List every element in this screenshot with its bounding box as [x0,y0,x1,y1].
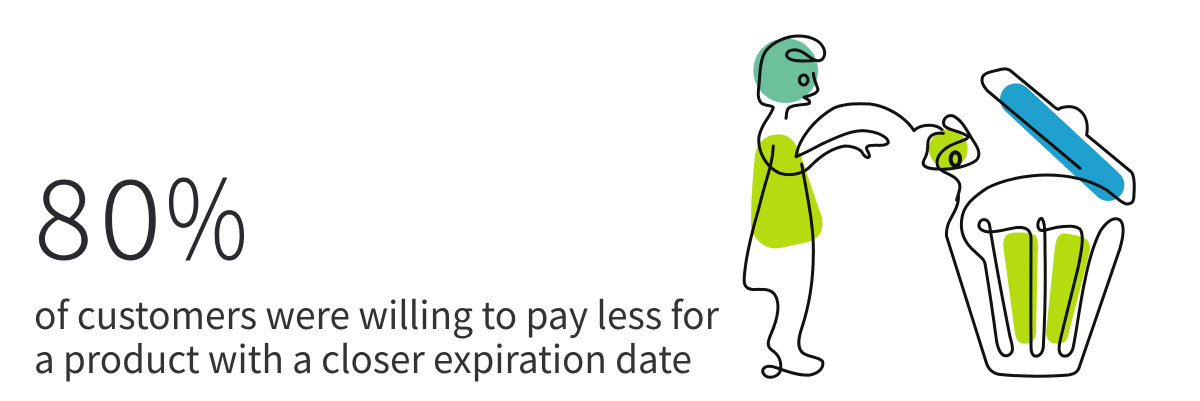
heading: 80% statistic [34,131,248,291]
icon: trash bin with open lid [946,69,1134,376]
icon: cup being dropped [923,116,979,200]
text block: description: a product with a closer expiration date [34,329,692,384]
text block: description: of customers were willing to pay less for [34,285,719,340]
bin and lid line art [946,69,1134,376]
heading: 80% statistic: 0 [99,131,162,291]
person line art [744,36,943,377]
heading: 80% statistic: 8 [34,131,93,291]
blue lid highlight [1016,99,1108,185]
eye [799,75,808,85]
green bin panels [1003,233,1038,344]
text block: description [34,285,719,384]
heading: 80% statistic: % [165,131,248,291]
face profile [786,73,818,118]
illustration: person throwing food in a bin [744,36,1134,377]
front leg and foot [744,146,823,377]
person colour fills [751,38,822,248]
